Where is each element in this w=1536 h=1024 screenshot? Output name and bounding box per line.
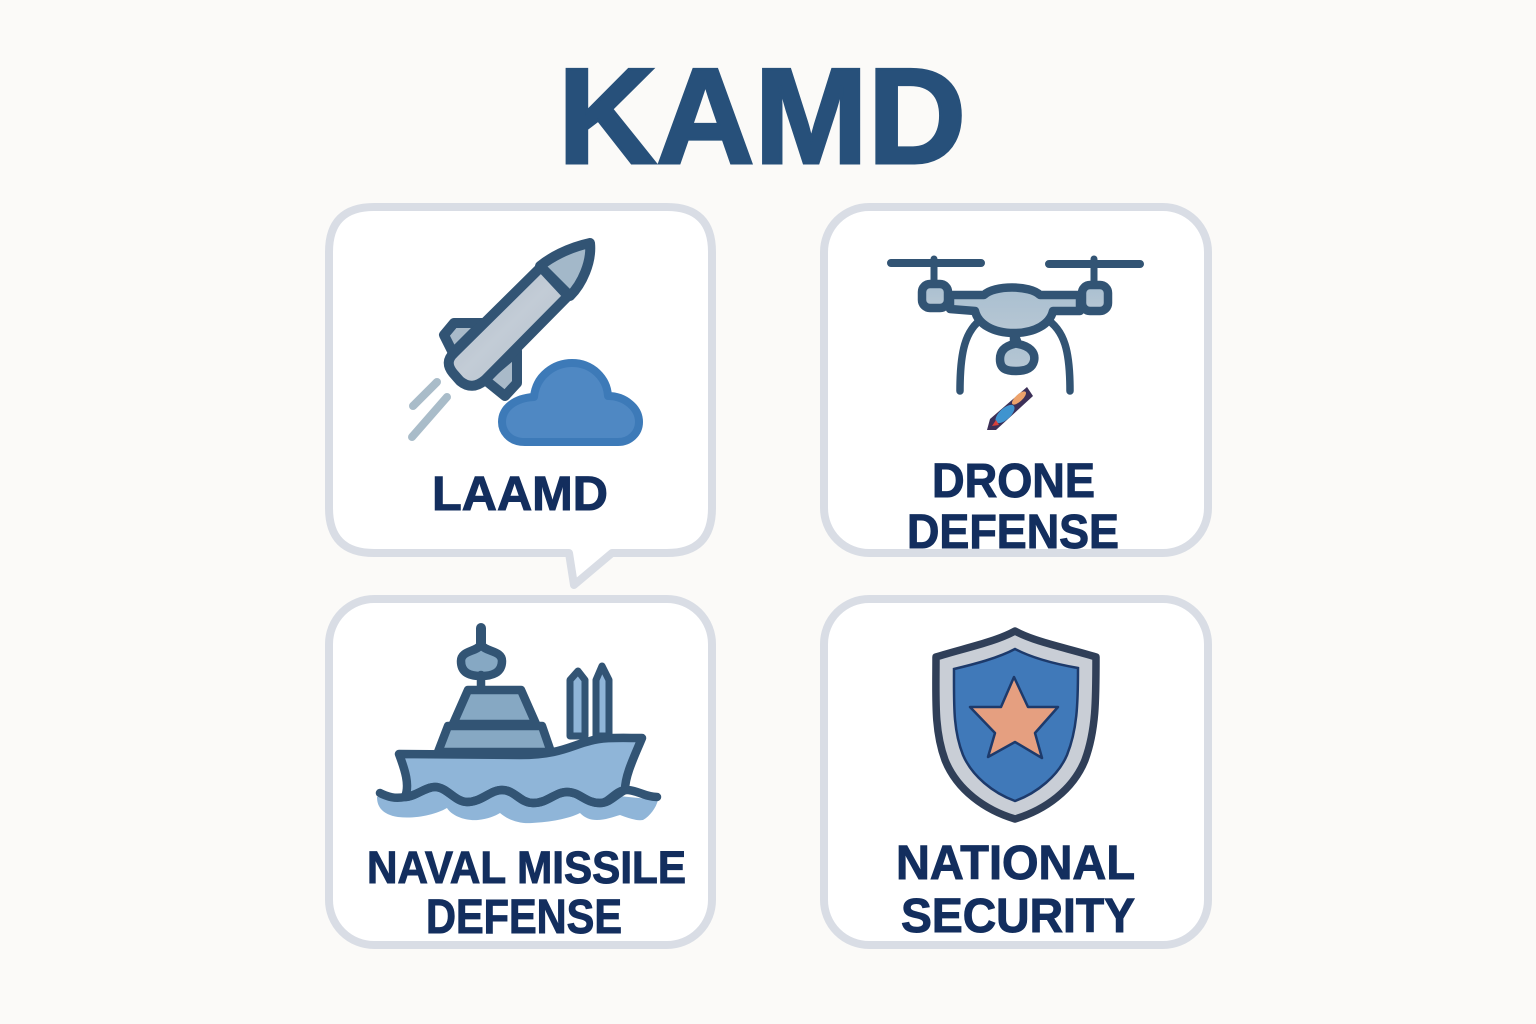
label: NAVAL MISSILE DEFENSE: DEFENSE: [426, 891, 622, 944]
panel frame: [824, 207, 1208, 553]
icon: warship: [380, 628, 657, 803]
icon: drone: [891, 259, 1140, 391]
panel: LAAMD: [329, 207, 712, 585]
label: DRONE DEFENSE: DEFENSE: [907, 506, 1119, 559]
icon: speed lines: [412, 382, 447, 437]
icon: rocket: [444, 243, 590, 396]
label: NAVAL MISSILE DEFENSE: NAVAL MISSILE: [367, 842, 686, 893]
panel frame with speech-bubble tail: [329, 207, 712, 585]
label: NATIONAL SECURITY: [896, 837, 1135, 943]
label: LAAMD: LAAMD: [432, 468, 608, 521]
title: KAMD: [558, 40, 966, 192]
icon: star: [970, 677, 1058, 758]
icon: shield: [936, 631, 1096, 819]
icon: small missile: [987, 387, 1033, 430]
panel frame: [329, 599, 712, 945]
label: NATIONAL SECURITY: SECURITY: [901, 890, 1135, 943]
panel frame: [824, 599, 1208, 945]
label: NATIONAL SECURITY: NATIONAL: [896, 837, 1135, 890]
label: DRONE DEFENSE: [907, 455, 1119, 559]
label: NAVAL MISSILE DEFENSE: [367, 842, 686, 944]
panel: naval missile defense: [329, 599, 712, 945]
icon: water: [377, 790, 658, 823]
panel: national security: [824, 599, 1208, 945]
icon: cloud: [502, 363, 639, 442]
label: DRONE DEFENSE: DRONE: [932, 455, 1095, 508]
panel: drone defense: [824, 207, 1208, 559]
